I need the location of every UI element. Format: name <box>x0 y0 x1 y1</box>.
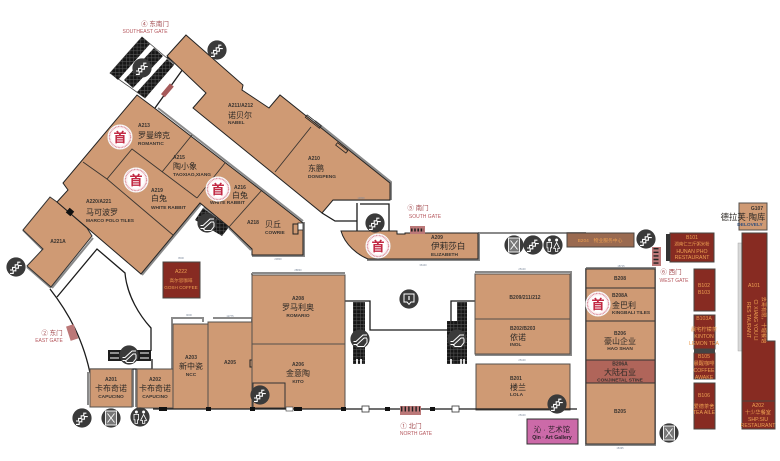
dimension labels: 28830 <box>294 268 302 272</box>
panel: B105 Coffee Awake: B105 <box>698 354 710 360</box>
panel: G107 Delovely: DELOVELY <box>737 222 764 228</box>
panel: A211 A212 Nabel: 诺贝尔 <box>228 110 252 120</box>
panel: Qin Art Gallery: 沁 · 艺术馆 <box>534 425 570 434</box>
panel: B202 B203 Inol: B202/B203 <box>510 326 536 332</box>
panel: B105 Coffee Awake: 晨醒咖啡 <box>694 359 714 367</box>
dimension labels: 18495 <box>616 446 624 450</box>
panel: A202 Shp Siu Restaurant: RESTAURANT <box>741 423 776 429</box>
escalator left <box>353 302 365 364</box>
panel: A202 Capucino: CAPUCINO <box>142 394 168 400</box>
panel: B101 Hunan Pho: HUNAN PHO <box>676 249 708 255</box>
panel: A203 NCC <box>173 324 208 409</box>
panel: A222 Gosh Coffee: GOSH COFFEE <box>164 285 198 290</box>
gate: east label <box>35 324 78 344</box>
panel: A205 <box>208 322 255 409</box>
south-east stair block <box>110 37 174 98</box>
panel: A216 White Rabbit: 白兔 <box>232 190 248 200</box>
icon: stairs centre west <box>197 213 217 233</box>
icon: stairs, A201 <box>72 408 92 428</box>
icon: lift, north wall <box>504 235 524 255</box>
panel: A101 restaurant: A101 <box>748 283 760 289</box>
panel: west block outline <box>57 95 303 274</box>
dimension labels: 25100 <box>518 267 526 271</box>
panel: A210 Dongpeng: A210 <box>308 156 320 162</box>
panel: A208 Romario: 罗马利奥 <box>282 302 314 312</box>
panel: B102 B103 <box>694 269 715 311</box>
badge: White Rabbit A216: 首 <box>211 182 225 197</box>
panel: A221A <box>23 197 92 287</box>
panel: A211 A212 Nabel <box>167 35 390 213</box>
gate: southeast label: ④ 东南门 <box>141 19 169 28</box>
panel: B206 Hao Shan <box>586 321 655 360</box>
panel: B208: B208 <box>614 276 626 282</box>
panel: A220 A221 Marco Polo: MARCO POLO TILES <box>86 218 135 224</box>
panel: A216 White Rabbit: WHITE RABBIT <box>210 200 245 206</box>
dimension labels: 25100 <box>518 413 526 417</box>
interior walls: central atrium <box>345 301 475 330</box>
panel: B201 Lola: LOLA <box>510 392 524 398</box>
panel: A209 Elizabeth: A209 <box>431 235 443 241</box>
gate: west label <box>652 247 689 284</box>
panel: B209 B211 B212 <box>475 274 570 319</box>
dimension labels: 25100 <box>518 358 526 362</box>
panel: A222 Gosh Coffee <box>163 262 200 298</box>
panel: Qin Art Gallery: Qin · Art Gallery <box>532 435 572 441</box>
icon: lift, A201 <box>101 408 121 428</box>
panel: B201 Lola: 楼兰 <box>510 382 526 392</box>
badge: Romantic: 首 <box>113 130 127 145</box>
panel: A210 Dongpeng: DONGPENG <box>308 174 336 180</box>
gate: southeast label <box>122 19 169 35</box>
panel: A220 A221 Marco Polo: 马可波罗 <box>86 207 118 217</box>
panel: A215 Taoxiao Xiang <box>173 155 211 178</box>
panel: B204 property service centre: B204 物业服务中心 <box>578 237 623 244</box>
panel: B101 Hunan Pho: B101 <box>686 235 698 241</box>
panel: A209 Elizabeth: 伊莉莎白 <box>431 240 465 251</box>
label: A211/A212: A211/A212 <box>228 103 253 109</box>
panel: Qin Art Gallery <box>527 419 578 444</box>
panel: A215 Taoxiao Xiang: TAOXIAO,XIANG <box>173 172 211 178</box>
panel: B201 Lola: B201 <box>510 376 522 382</box>
panel: B103A Kinton Lemon Tea: LEMON TEA <box>689 341 719 347</box>
badge: Elizabeth: 首 <box>371 239 385 254</box>
panel: B208A Kingbali Tiles: 金巴利 <box>612 300 636 310</box>
panel: A101 restaurant: 去哥有限，十堰餐馆 <box>760 297 768 343</box>
panel: B101 Hunan Pho: RESTAURANT <box>675 255 710 261</box>
panel: A203 NCC: 新中瓷 <box>179 361 203 371</box>
panel: B102 B103: B103 <box>698 290 710 296</box>
gate: south label: ⑤ 南门 <box>407 203 429 212</box>
south wall <box>153 406 577 412</box>
panel: A202 Capucino: 卡布奇诺 <box>139 383 171 393</box>
panel: B202 B203 Inol: INOL <box>510 342 522 348</box>
panel: A219 White Rabbit: 白兔 <box>151 193 167 203</box>
gate: southeast marker <box>161 83 174 97</box>
panel: B103A Kinton Lemon Tea: KINTON <box>694 334 714 340</box>
panel: G107 Delovely: 德拉芙·陶库 <box>721 212 765 222</box>
panel: A202 Shp Siu Restaurant: SHP.SIU <box>748 417 768 423</box>
gate: south label <box>407 203 442 234</box>
panel: B208A Kingbali Tiles <box>586 288 655 321</box>
panel: B106 Tea Aile: TEA AILE <box>693 410 716 416</box>
panel: A202 Shp Siu Restaurant <box>741 401 776 429</box>
badge: Kingbali Tiles <box>586 292 610 316</box>
panel: A210 Dongpeng <box>275 115 348 180</box>
panel: A201 Capucino: CAPUCINO <box>98 394 124 400</box>
dimension labels: 18715 <box>617 264 625 268</box>
panel: B106 Tea Aile <box>693 383 716 429</box>
badge: Romantic <box>108 125 132 149</box>
dimension labels: 9500 <box>178 256 184 260</box>
panel: B102 B103: B102 <box>698 283 710 289</box>
panel: A210 Dongpeng: 东鹏 <box>308 163 324 173</box>
panel: A213 Romantic: 罗曼缔克 <box>138 130 170 140</box>
panel: A222 Gosh Coffee: 高尔思咖啡 <box>170 277 193 284</box>
panel: A202 Shp Siu Restaurant: A202 <box>752 403 764 409</box>
panel: A213 Romantic: ROMANTIC <box>138 141 164 147</box>
badge: Kingbali Tiles: 首 <box>591 297 605 312</box>
dimension labels: 14800 <box>357 196 365 200</box>
gate: east label: EAST GATE <box>35 338 63 344</box>
panel: A221A: A221A <box>50 239 66 245</box>
icon: stairs, west gate <box>636 229 656 249</box>
icon: lift, south east <box>659 423 679 443</box>
panel: A216 White Rabbit <box>210 185 262 227</box>
panel: A202 Capucino <box>137 369 173 408</box>
dimension labels: 12775 <box>226 314 234 318</box>
panel: A213 Romantic: A213 <box>138 123 150 129</box>
panel: B206 Hao Shan: HAO SHAN <box>607 346 633 352</box>
south-west stair block <box>195 208 229 236</box>
icon: information point <box>399 289 419 309</box>
panel: A219 White Rabbit <box>107 179 186 235</box>
panel: B206 Hao Shan: 豪山企业 <box>604 336 636 346</box>
panel: B206A Continental Stone: CONJINETAL STINE <box>597 378 644 384</box>
panel: B106 Tea Aile: B106 <box>698 393 710 399</box>
badge: White Rabbit A219 <box>124 168 148 192</box>
panel: A101 restaurant <box>738 233 775 401</box>
icon: stairs, Lola <box>547 394 567 414</box>
panel: A215 Taoxiao Xiang: 陶小象 <box>173 161 197 171</box>
panel: A220 A221 Marco Polo <box>66 199 135 224</box>
icon: stairs, north wall <box>523 235 543 255</box>
icon: escalator, right atrium <box>447 329 467 349</box>
icon: washroom, north wall <box>543 235 563 255</box>
gate: north label: NORTH GATE <box>400 431 433 437</box>
panel: A218 Cowrie: 贝丘 <box>265 220 281 229</box>
gate: east label: ② 东门 <box>41 328 63 337</box>
escalator east <box>108 350 151 361</box>
gate: west label: WEST GATE <box>660 278 689 284</box>
interior walls: south court <box>322 200 390 231</box>
panel: G107 Delovely: G107 <box>751 206 763 212</box>
panel: A202 Capucino: A202 <box>149 377 161 383</box>
dimension labels: 23800 <box>274 257 282 261</box>
badge: Elizabeth <box>366 234 390 258</box>
panel: A213 Romantic <box>83 123 225 198</box>
panel: A206 Kito: 金意陶 <box>286 368 310 378</box>
panel: B106 Tea Aile: 爱德茶舍 <box>694 402 715 410</box>
panel: A206 Kito: KITO <box>292 379 304 385</box>
panel: A201 Capucino: 卡布奇诺 <box>95 383 127 393</box>
panel: A209 Elizabeth <box>341 231 478 259</box>
badge: White Rabbit A216 <box>206 177 230 201</box>
panel: A201 Capucino <box>90 369 132 407</box>
panel: B208A Kingbali Tiles: KINGBALI TILES <box>612 310 651 316</box>
escalator right <box>447 302 467 364</box>
panel: A220 A221 Marco Polo: A220/A221 <box>86 199 112 205</box>
interior walls: southeast corridor <box>155 57 183 108</box>
panel: B105 Coffee Awake: AWAKE <box>695 375 714 381</box>
panel: A216 White Rabbit: A216 <box>234 185 246 191</box>
panel: B103A Kinton Lemon Tea: B103A <box>696 316 712 322</box>
panel: A218 Cowrie: A218 <box>247 220 259 226</box>
panel: B202 B203 Inol: 依诺 <box>510 332 526 342</box>
dimension labels: 9000 <box>186 313 192 317</box>
corridor double walls <box>23 106 655 445</box>
panel: A208 Romario <box>252 275 345 344</box>
panel: B205 <box>586 383 655 444</box>
panel: B103A Kinton Lemon Tea: 晨宅柠檬茶 <box>691 325 718 333</box>
panel: A218 Cowrie: COWRIE <box>265 230 286 236</box>
panel: A219 White Rabbit: A219 <box>151 188 163 194</box>
panel: G107 Delovely <box>721 203 767 230</box>
panel: A201 Capucino: A201 <box>105 377 117 383</box>
gate: north label <box>400 406 433 437</box>
gate: southeast label: SOUTHEAST GATE <box>122 29 168 35</box>
panel: B105 Coffee Awake <box>693 349 715 381</box>
panel: B206A Continental Stone: 大陆石业 <box>604 367 636 377</box>
dimension labels: 36440 <box>419 263 427 267</box>
icon: escalator, left atrium <box>350 329 370 349</box>
panel: B101 Hunan Pho: 湖南仁三斤粥米粉 <box>674 240 710 248</box>
panel: B101 Hunan Pho <box>666 233 714 262</box>
panel: A206 Kito <box>252 344 345 409</box>
panel: A219 White Rabbit: WHITE RABBIT <box>151 205 186 211</box>
panel: B209 B211 B212: B209/211/212 <box>509 295 541 301</box>
panel: B105 Coffee Awake: COFFEE <box>693 368 715 374</box>
icon: stairs, top <box>207 40 227 60</box>
panel: A211 A212 Nabel: NABEL <box>228 120 245 126</box>
panel: A202 Shp Siu Restaurant: 十少华餐室 <box>745 408 771 416</box>
panel: A203 NCC: A203 <box>185 355 197 361</box>
panel: B205: B205 <box>614 409 626 415</box>
dimension labels <box>178 196 625 450</box>
panel: B206A Continental Stone <box>586 360 655 384</box>
icon: stairs, south court <box>365 213 385 233</box>
panel: A209 Elizabeth: ELIZABETH <box>431 252 458 258</box>
icon: escalator, east atrium <box>119 345 139 365</box>
panel: B208A Kingbali Tiles: B208A <box>612 293 628 299</box>
panel: A222 Gosh Coffee: A222 <box>175 269 187 275</box>
interior wall: east atrium <box>50 249 152 378</box>
panel: A208 Romario: A208 <box>292 296 304 302</box>
gate: north label: ① 北门 <box>400 421 422 430</box>
panel: A208 Romario: ROMARIO <box>286 313 310 319</box>
panel: B103A Kinton Lemon Tea <box>689 315 719 349</box>
panel: A218 Cowrie <box>247 220 303 236</box>
gate: south label: SOUTH GATE <box>409 214 442 220</box>
icon: stairs, A206 <box>250 385 270 405</box>
badge: White Rabbit A219: 首 <box>129 173 143 188</box>
panel: A215 Taoxiao Xiang: A215 <box>173 155 185 161</box>
panel: A101 restaurant: CI XIANG YOU LI <box>752 299 758 341</box>
panel: B206 Hao Shan: B206 <box>614 331 626 337</box>
panel: B202 B203 Inol <box>475 319 570 354</box>
icon: stairs, east <box>6 257 26 277</box>
panel: A205: A205 <box>224 360 236 366</box>
panel: B204 property service centre <box>567 233 634 247</box>
panel: A206 Kito: A206 <box>292 362 304 368</box>
panel: B206A Continental Stone: B206A <box>612 362 628 368</box>
icon: washroom, A202 <box>130 407 150 427</box>
panel: A203 NCC: NCC <box>186 372 197 378</box>
panel: A101 restaurant: RES TAURANT <box>745 302 751 339</box>
gate: west label: ⑥ 西门 <box>660 267 682 276</box>
panel: B208 <box>586 269 655 288</box>
panel: B201 Lola <box>476 364 570 410</box>
